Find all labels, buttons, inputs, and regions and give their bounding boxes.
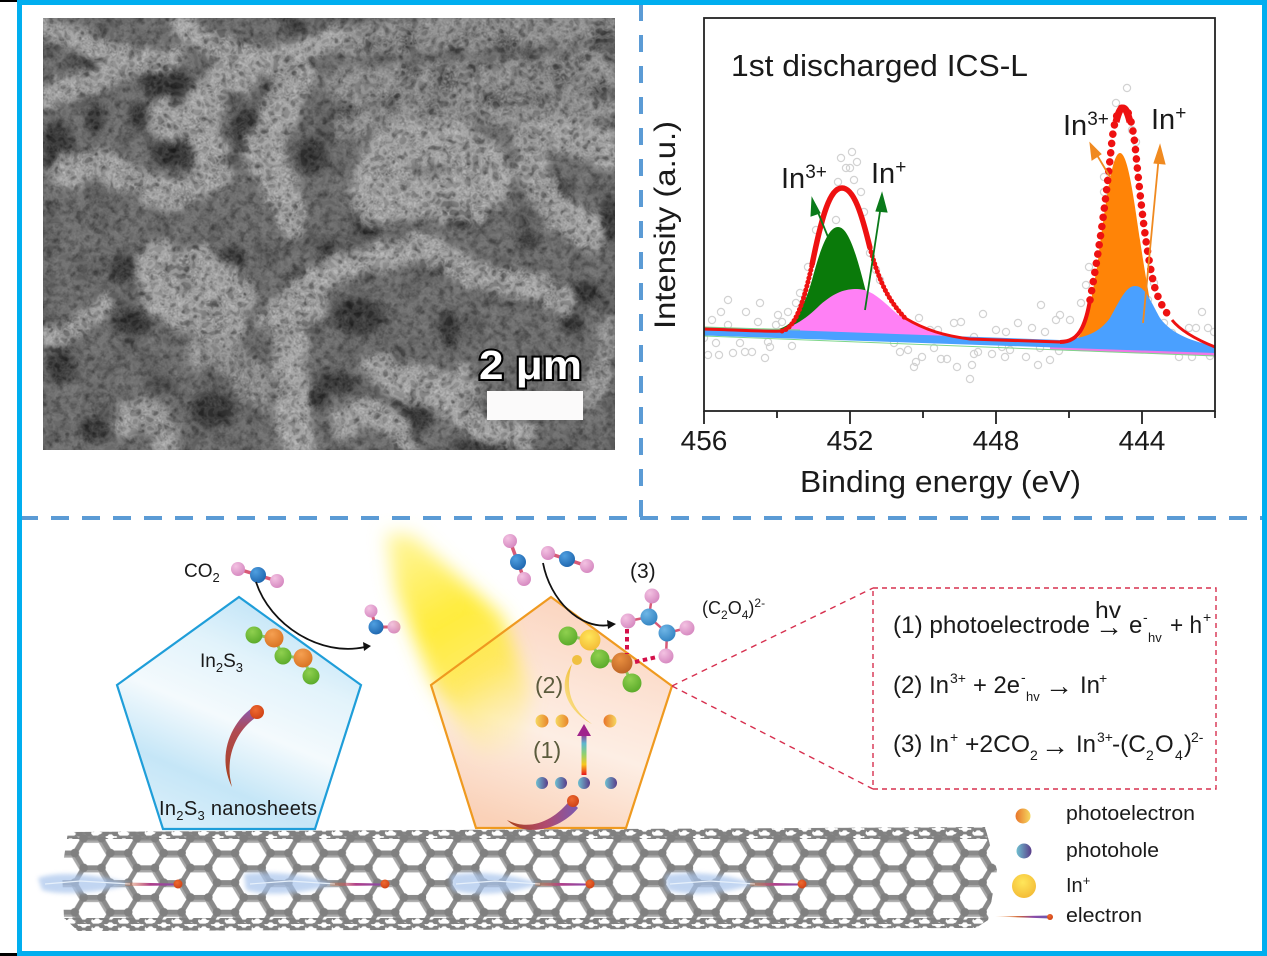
electron swoosh (225, 705, 264, 787)
legend: In+: In (1066, 875, 1083, 897)
label In+ right: + (1175, 103, 1186, 124)
dashed dividers (20, 4, 1262, 518)
peak: In3+ 3d5/2 orange (1075, 153, 1153, 345)
x axis tick labels: 456 (681, 425, 727, 456)
atoms: In2S3 chain (246, 626, 320, 684)
molecule: CO2 upper right (541, 546, 594, 573)
equation 3: +2CO (965, 731, 1030, 758)
label C2O4 2-: 4 (742, 608, 749, 622)
x axis title: Binding energy (eV) (800, 464, 1081, 499)
label In2S3 nanosheets: In (159, 798, 176, 820)
pentagon: illuminated In2S3 (386, 533, 672, 830)
label In2S3 nanosheets: nanosheets (205, 798, 317, 820)
equation 3: 3+ (1097, 729, 1113, 745)
legend: photohole: photohole (1066, 840, 1159, 862)
fit envelope, second peak dotted (1060, 108, 1215, 347)
electron streak 3 (450, 873, 594, 894)
arrow: In+ green (865, 193, 887, 310)
electron streak 1 (38, 874, 182, 893)
label In2S3: In (200, 651, 216, 672)
label In2S3 nanosheets: 2 (176, 808, 184, 823)
label CO2: 2 (212, 570, 220, 585)
legend (995, 803, 1195, 927)
arrow: In+ orange (1143, 145, 1165, 323)
legend: photoelectron (1016, 803, 1195, 825)
photoelectrons (536, 655, 616, 728)
equation 1: + h (1170, 612, 1202, 639)
label C2O4 2-: ) (748, 598, 754, 618)
legend: electron (995, 905, 1142, 927)
label In3+ right: 3+ (1087, 109, 1109, 130)
equation 1: (1) photoelectrode (893, 612, 1090, 639)
legend: electron: electron (1066, 905, 1142, 927)
label C2O4 2-: (C (702, 598, 721, 618)
label C2O4 2-: 2 (721, 608, 728, 622)
light beam (386, 533, 530, 755)
peak: In+ 3d3/2 magenta (770, 289, 950, 342)
peak: In3+ 3d3/2 green (770, 227, 870, 336)
label In2S3 nanosheets: 3 (197, 808, 205, 823)
x axis tick labels: 452 (827, 425, 873, 456)
callout lines (672, 588, 873, 789)
label In2S3: S (223, 651, 236, 672)
label (3): (3) (630, 560, 656, 583)
x axis tick labels (681, 425, 1165, 456)
label In+ left: In (871, 158, 895, 190)
equation 2: → (1045, 670, 1073, 701)
equation 2: (2) In (893, 672, 949, 699)
label C2O4 2-: O (728, 598, 742, 618)
equation 1: hv (1148, 630, 1162, 645)
equation 3: -(C (1112, 731, 1146, 758)
arrow: In3+ green (811, 198, 828, 237)
chart title: 1st discharged ICS-L (731, 48, 1028, 83)
scatter data points (700, 84, 1218, 383)
equation 2: In (1080, 672, 1100, 699)
dotted In-O bonds (627, 629, 657, 662)
electron streak 2 (244, 873, 390, 894)
pentagon: In2S3 nanosheet (117, 597, 361, 829)
equation 3: (3) In (893, 731, 949, 758)
electron swoosh (507, 795, 579, 830)
panel: SEM micrograph (43, 18, 619, 453)
peak: In+ 3d5/2 blue and baseline band (704, 286, 1215, 353)
panel: XPS spectrum (649, 18, 1218, 499)
x axis tick labels: 448 (973, 425, 1019, 456)
equation 3: 2 (1030, 747, 1038, 763)
y axis title: Intensity (a.u.) (649, 121, 682, 329)
legend: photoelectron: photoelectron (1066, 803, 1195, 825)
arrow: CO2 curved (256, 582, 371, 651)
equation 1: → (1095, 611, 1123, 642)
label In2S3: 2 (216, 660, 223, 675)
equation 2: hv (1026, 689, 1040, 704)
label In3+ left: 3+ (805, 162, 827, 183)
label In2S3 nanosheets: S (184, 798, 197, 820)
equation 3: + (950, 729, 958, 745)
equation 3: 4 (1175, 747, 1183, 763)
arrow: CO2 to oxalate (543, 563, 616, 629)
legend: photohole (1016, 840, 1159, 862)
label In3+ right: In (1063, 110, 1087, 142)
scale bar label: 2 μm (479, 342, 582, 388)
equation 3: 2- (1191, 729, 1204, 745)
equation 2: + (1099, 670, 1107, 686)
equation 3: In (1076, 731, 1096, 758)
equation 1: e (1129, 612, 1142, 639)
callout: reaction equations (873, 588, 1216, 789)
x axis tick labels: 444 (1119, 425, 1165, 456)
equation 3: ) (1184, 731, 1192, 758)
equation 3: 2 (1146, 747, 1154, 763)
baseline green trace (704, 327, 1215, 356)
equation 1 (893, 597, 1211, 645)
carbon nanotube (38, 825, 1000, 935)
label (1): (1) (533, 737, 561, 763)
label In+ right: In (1151, 104, 1175, 136)
equation 3: → (1041, 730, 1069, 761)
arrow: rainbow excitation (577, 724, 591, 775)
equation 3: O (1155, 731, 1174, 758)
plot frame and ticks (704, 18, 1215, 424)
equation 2: 3+ (950, 670, 966, 686)
label In+ left: + (895, 157, 906, 178)
legend: In+: + (1083, 873, 1090, 888)
atoms: In2S3 chain with In+ (558, 626, 642, 692)
equation 2: + 2e (973, 672, 1020, 699)
arrow: In3+ orange (1090, 143, 1110, 177)
legend: In+ (1012, 873, 1090, 898)
molecule: CO2 released (364, 604, 400, 634)
swoosh: reduction path (565, 664, 592, 724)
equation 1: + (1203, 609, 1211, 625)
label C2O4 2-: 2- (754, 596, 765, 610)
baseline pink (1050, 345, 1215, 356)
label In2S3: 3 (236, 660, 243, 675)
label In3+ left: In (781, 163, 805, 195)
molecule: CO2 upper left (503, 534, 531, 586)
electron streak 4 (665, 873, 806, 894)
equation 1: - (1143, 609, 1148, 625)
equation 1: hv (1095, 597, 1122, 623)
scale bar (487, 391, 583, 420)
label (2): (2) (535, 672, 563, 698)
equation 2: - (1021, 669, 1026, 685)
molecule: oxalate C2O4 (620, 588, 694, 664)
photoholes (536, 777, 617, 789)
equation 2 (893, 669, 1107, 704)
fit envelope, first peak (704, 188, 1060, 342)
molecule: CO2 incoming (231, 562, 284, 588)
label CO2: CO (184, 561, 212, 582)
equation 3 (893, 729, 1204, 763)
